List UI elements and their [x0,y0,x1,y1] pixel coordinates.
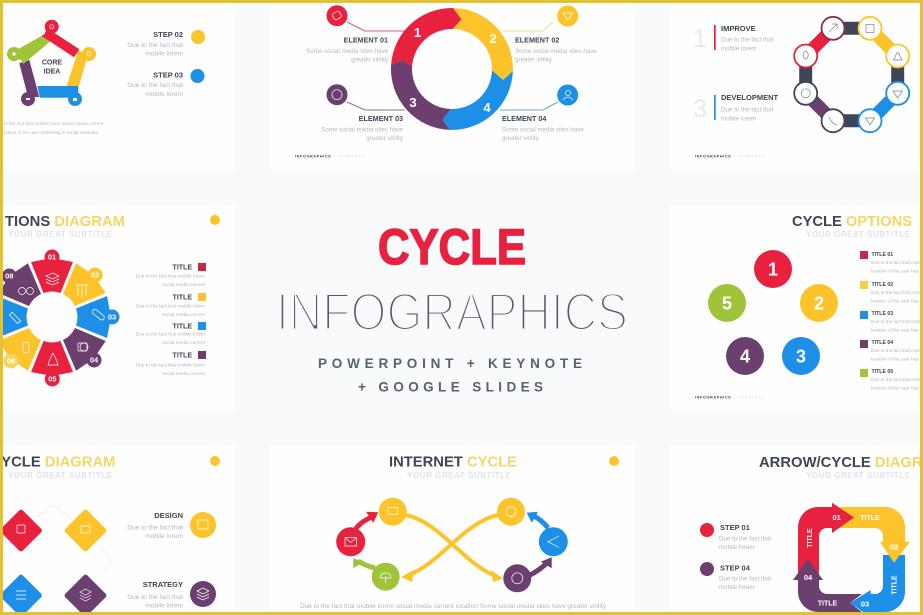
legend row: title 3: social media current [162,340,206,346]
panel: chain ring [670,0,923,170]
step 04: STEP 04 [720,564,751,572]
decorative dot [609,456,619,466]
development text: DEVELOPMENT [721,93,779,102]
step 02: STEP 02 [153,30,183,39]
development text: 3 [693,95,707,123]
legend row: title 1: Due to the fact that mobile lorem [136,274,205,280]
legend row: title 3: Due to the fact that mobile lorem [136,332,205,338]
legend row 3: location of the user has [871,328,919,332]
ring segment chart: 2 [489,31,497,46]
panel: pentagon core idea [0,0,235,170]
core idea label: CORE [42,60,62,66]
legend row 5: TITLE 05 [872,369,893,375]
element 03 text: ELEMENT 03 [359,114,403,123]
square arrow cycle: TITLE [807,528,814,548]
element 02 text: ELEMENT 02 [515,36,559,44]
heading: INTERNET CYCLE [389,454,517,470]
legend row: title 4: Due to the fact that mobile lorem [136,362,205,368]
footnote [4,121,104,135]
strategy text: Due to the fact that [127,594,183,601]
icon: element 04 [557,84,578,106]
wheel chart [0,250,120,386]
wheel chart: 06 [7,357,15,366]
icon: design [190,512,216,538]
element 01 text: ELEMENT 01 [344,36,388,44]
square arrow cycle: 01 [833,513,841,522]
icon: element 02 [557,6,578,26]
footer label: TEMPLATE [738,396,765,400]
main title: infographics: INFOGRAPHICS [276,283,628,342]
node: share [539,527,568,556]
element 04 text: Some social media sites have [502,126,584,134]
improve text: IMPROVE [721,24,756,33]
node: cloud [372,563,400,591]
node: laptop [379,498,407,526]
chain ring diagram [794,17,909,132]
development text: mobile lorem [721,116,756,122]
main subtitle line 2: + GOOGLE SLIDES [358,380,543,394]
footer label [295,154,365,158]
panel: ring of four elements [270,0,635,170]
pentagon diagram [7,20,96,106]
node: globe [503,564,531,592]
caption: Due to the fact that mobile lorem social media current location Some social media sites have greater virility [300,603,607,610]
legend row 3 [860,311,923,332]
step 01: mobile lorem [719,544,754,551]
decorative dot [210,215,220,225]
improve text: mobile lorem [721,46,756,52]
ring segment chart [391,8,513,130]
numbered circles chart: 5 [722,294,732,314]
subtitle: YOUR GREAT SUBTITLE [806,230,911,239]
diamond cycle chart [0,506,110,615]
legend row 3: TITLE 03 [872,311,893,317]
wheel chart: 05 [48,375,56,384]
subtitle: YOUR GREAT SUBTITLE [407,471,512,480]
panel: cycle diagram diamonds [0,445,235,615]
element 03 text: greater virility [366,135,404,142]
legend row 5: location of the user has [871,386,919,390]
footer label: INFOGRAPHICS [295,154,331,158]
legend row: title 2: social media current [162,312,206,318]
legend row: title 2: TITLE [173,294,192,302]
numbered circles chart [708,250,838,375]
element 03 text [321,114,404,142]
design text: Due to the fact that [127,524,183,532]
step 01: Due to the fact that [719,536,772,542]
legend row: title 4 [136,351,206,377]
square arrow cycle: 03 [861,600,869,608]
improve text [693,24,774,53]
element 04 text: ELEMENT 04 [502,114,546,123]
improve text: 1 [693,25,707,53]
element 02 text: greater virility [515,56,553,64]
legend row 2: TITLE 02 [872,282,893,288]
subtitle: YOUR GREAT SUBTITLE [8,230,113,239]
step 04 [700,562,772,591]
strategy text: mobile lorem [145,602,184,610]
core idea label line 2: IDEA [44,68,60,76]
decorative dot [210,456,220,466]
strategy text [127,580,184,610]
panel: internet cycle [270,445,635,615]
node: refresh [497,498,525,526]
wheel chart: 08 [5,272,13,281]
wheel chart: 03 [108,313,116,322]
heading: CYCLE OPTIONS [792,214,912,230]
step 02 [127,30,205,58]
square arrow cycle: TITLE [818,600,838,608]
step 02: mobile lorem [145,50,184,58]
panel: options diagram wheel [0,205,235,410]
square arrow cycle: TITLE [860,515,880,522]
legend row 4: location of the user has [871,356,919,362]
heading: YCLE DIAGRAM [1,454,116,470]
improve text: Due to the fact that [721,36,774,44]
legend row 1: TITLE 01 [872,252,893,258]
square arrow cycle: 02 [890,542,898,552]
legend row 2 [860,281,923,304]
step 03: Due to the fact that [127,82,183,89]
icon: element 03 [326,84,348,105]
footer label [695,396,765,400]
element 02 text: Some social media sites have [515,48,597,55]
ring segment chart: 1 [414,25,421,40]
element 01 text: greater virility [351,56,389,64]
footnote: cation of the user marketing is social networks [4,130,99,135]
legend row: title 3 [136,322,206,346]
connector lines [347,22,558,110]
numbered circles chart: 2 [814,294,824,314]
element 04 text [502,114,584,142]
step 03 [127,69,204,98]
square arrow cycle: 04 [804,573,813,582]
legend row 4 [860,340,923,362]
numbered circles chart: 3 [796,346,806,366]
footer label: INFOGRAPHICS [695,154,731,158]
legend row: title 4: TITLE [173,352,192,360]
step 04: Due to the fact that [719,576,772,582]
heading: TIONS DIAGRAM [5,214,125,230]
infinity arrows [353,512,552,582]
ring segment chart: 4 [483,100,491,115]
legend row: title 1 [136,263,206,288]
icon: strategy [190,581,216,607]
panel: arrow cycle diagram [670,445,923,615]
element 01 text [306,36,389,64]
design text: mobile lorem [145,533,184,540]
legend row: title 2 [136,293,206,318]
main title: cycle: CYCLE [378,219,526,275]
step 01: STEP 01 [720,523,750,532]
legend row: title 3: TITLE [173,324,192,330]
icon: element 01 [326,5,348,26]
subtitle: YOUR GREAT SUBTITLE [806,471,911,480]
element 04 text: greater virility [502,135,540,142]
step 01 [700,523,772,551]
element 02 text [515,36,597,64]
numbered circles chart: 1 [768,260,778,280]
element 01 text: Some social media sites have [306,48,389,55]
square arrow cycle: TITLE [892,575,898,595]
legend row: title 1: TITLE [173,264,192,272]
subtitle: YOUR GREAT SUBTITLE [8,471,113,480]
step 03: STEP 03 [153,70,183,80]
legend row 4: TITLE 04 [872,340,893,346]
step 03: mobile lorem [145,91,184,98]
legend row 1: location of the user has [871,268,919,274]
node: mail [336,527,365,556]
legend row 5 [860,369,923,390]
legend row: title 2: Due to the fact that mobile lorem [136,304,205,310]
main subtitle line 1: POWERPOINT + KEYNOTE [318,356,582,371]
design text [127,511,184,540]
footer label: TEMPLATE [338,154,365,158]
legend row: title 1: social media current [162,282,206,288]
panel: cycle options circles [670,205,923,410]
footer label: INFOGRAPHICS [695,396,731,400]
ring segment chart: 3 [409,95,417,110]
square arrow cycle [793,503,910,615]
wheel chart: 04 [90,356,99,365]
legend row: title 4: social media current [162,371,206,377]
legend row 2: location of the user has [871,298,919,304]
design text: DESIGN [154,511,183,520]
element 03 text: Some social media sites have [321,126,404,134]
strategy text: STRATEGY [143,580,183,589]
step 02: Due to the fact that [127,42,183,49]
development text: Due to the fact that [721,106,774,114]
legend row 1 [860,251,923,274]
wheel chart: 01 [48,253,56,262]
development text [693,93,779,123]
numbered circles chart: 4 [740,346,750,366]
footer label [695,154,765,158]
footnote: to the fact that mobile lorem social media current [4,121,104,126]
footer label: TEMPLATE [738,154,765,158]
step 04: mobile lorem [719,584,754,591]
wheel chart: 02 [91,271,99,280]
